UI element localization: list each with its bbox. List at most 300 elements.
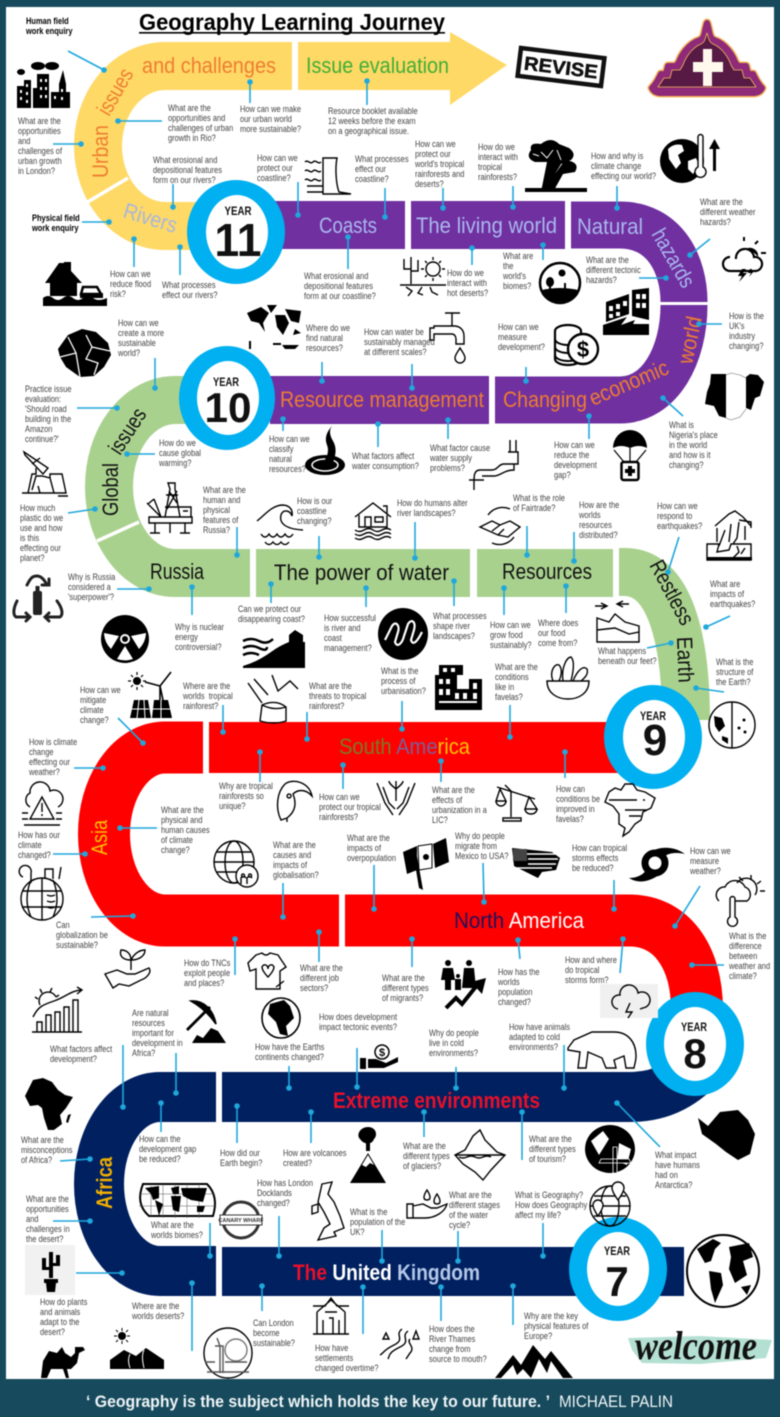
- text: sustainable urban world: more sustainable?: [240, 124, 301, 134]
- icon: rainforest trees: [525, 140, 587, 192]
- text: features at coastline: form at our coastline?: [304, 291, 376, 301]
- text: impacts of earthquakes: impacts of: [710, 589, 744, 599]
- text: disappearing coast: disappearing coast?: [238, 614, 305, 624]
- icon: settlement house: [313, 1298, 349, 1334]
- text: weather and climate: difference: [729, 941, 762, 951]
- text: coast management: [324, 613, 376, 653]
- text: opportunities in London: challenges of: [18, 146, 62, 156]
- text: resource booklet: Resource booklet available: [328, 106, 418, 116]
- band: year 9 south america (red): [209, 722, 654, 773]
- text: opportunities in Rio: What are the: [168, 103, 211, 113]
- text: improve favelas: favelas?: [556, 814, 584, 824]
- text: where food comes from: [538, 618, 578, 648]
- band labels: Resource management: [280, 387, 484, 412]
- text: shape river landscapes: landscapes?: [433, 631, 475, 641]
- text: opportunities in London: What are the: [18, 116, 61, 126]
- icon: oil swirl: [305, 425, 345, 475]
- text: water cycle: What are the: [449, 1190, 492, 1200]
- text: reduce development gap: How can the: [139, 1134, 181, 1144]
- text: UK population: What is the: [350, 1207, 387, 1217]
- text: climate changed: [18, 830, 60, 860]
- icon: volcano: [350, 1127, 386, 1183]
- text: global warming: [158, 438, 202, 469]
- text: natural resources in Africa: important for: [132, 1028, 174, 1038]
- text: world's biomes: [502, 251, 534, 291]
- text: climate change: [590, 151, 656, 182]
- text: measure development: [498, 322, 546, 352]
- text: tropical storms form: [565, 955, 617, 985]
- text: plastic use: is this: [20, 533, 39, 543]
- text: opportunities in London: [18, 116, 63, 176]
- text: weather hazards: hazards?: [700, 217, 731, 227]
- text: practice issue evaluation: [24, 384, 72, 444]
- band: year 11 urban issues and rivers (yellow): [86, 66, 292, 226]
- text: development gap: How can we: [554, 440, 595, 450]
- text: sustainable urban world: How can we make: [240, 104, 301, 114]
- text: plastic use: effecting our: [20, 543, 61, 553]
- text: coastline changing: How is our: [297, 496, 332, 506]
- text: reduce development gap: [139, 1134, 196, 1164]
- text: worlds biomes: What are the: [151, 1220, 194, 1230]
- text: urbanisation: What is the: [381, 666, 418, 676]
- icon: globe and plane: [585, 1125, 635, 1173]
- text: settlements: How have: [315, 1343, 348, 1353]
- text: desert opportunities: and: [26, 1214, 38, 1224]
- text: resource booklet: on a geographical issue.: [328, 126, 409, 136]
- band: year 8 north america (red): [345, 920, 697, 1010]
- text: fairtrade: [512, 493, 566, 513]
- icon: globe and thermometer: [660, 134, 720, 183]
- text: river landscapes: [396, 498, 468, 518]
- icon: cut down tree: [248, 675, 298, 723]
- text: erosional features on rivers: What erosional and: [153, 155, 217, 165]
- text: water cycle: different stages: [449, 1200, 500, 1210]
- year 9 badge: [604, 685, 702, 789]
- text: features of Russia: Russia?: [203, 525, 230, 535]
- text: where food comes from: come from?: [538, 638, 577, 648]
- text: opportunities in Rio: opportunities and: [168, 113, 225, 123]
- icon: ocean wave: [257, 505, 303, 544]
- text: earth begin: [220, 1148, 262, 1168]
- text: tectonic hazards: hazards?: [586, 275, 617, 285]
- text: improve favelas: [556, 784, 600, 824]
- icon: aid parachute: [613, 430, 647, 480]
- text: water consumption: [351, 451, 420, 472]
- text: overpopulation: What are the: [347, 833, 390, 843]
- text: classify resources: resources?: [269, 464, 306, 474]
- text: favelas conditions: conditions: [495, 672, 529, 682]
- text: mitigate climate change: mitigate: [80, 695, 106, 705]
- year 10 badge: 10: [204, 384, 252, 431]
- band labels: Global: [98, 463, 123, 516]
- icon: sun and desert: [110, 1328, 164, 1369]
- text: cold environments life: environments?: [429, 1048, 478, 1058]
- icon: plastic bottle recycling: [14, 576, 62, 621]
- band labels: and challenges: [142, 53, 276, 78]
- text: development gap: [554, 440, 598, 481]
- band labels: South America: [339, 734, 471, 759]
- text: sustainable London: sustainable?: [253, 1338, 295, 1348]
- text: world's biomes: What are: [503, 251, 533, 261]
- text: rainforest threats: rainforest?: [309, 701, 344, 711]
- text: UK's industry: industry: [729, 331, 755, 341]
- icon: antarctica map: [698, 1110, 755, 1160]
- icon: toucan: [278, 781, 312, 822]
- icon: earth continents: [262, 998, 300, 1038]
- text: sustainable world: [117, 318, 164, 358]
- text: development tectonic events: How does development: [319, 1012, 397, 1022]
- text: plastic use: How much: [20, 503, 55, 513]
- text: desert opportunities: challenges in: [26, 1224, 70, 1234]
- text: sustainable urban world: [240, 104, 302, 134]
- text: resources distributed: How are the: [579, 500, 619, 510]
- text: overpopulation: impacts of: [347, 843, 381, 853]
- text: features of Europe: Europe?: [524, 1331, 552, 1341]
- text: glaciers: of glaciers?: [403, 1161, 441, 1171]
- text: measure weather: [690, 846, 731, 876]
- text: climate change: climate change: [591, 161, 641, 171]
- text: earth begin: Earth begin?: [220, 1158, 262, 1168]
- text: types of migrants: of migrants?: [382, 993, 423, 1003]
- text: causes of climate change: What are the: [161, 805, 204, 815]
- text: erosional features on rivers: form on our rivers?: [153, 175, 216, 185]
- text: coast management: coast: [324, 633, 342, 643]
- text: Nigeria: changing?: [669, 460, 703, 470]
- icon: collapsing building: [603, 288, 649, 335]
- text: measure weather: How can we: [690, 846, 731, 856]
- text: Nigeria: [668, 420, 718, 471]
- text: settlements: [315, 1343, 379, 1373]
- icon: hurricane: [629, 848, 685, 881]
- text: antarctica: have humans: [655, 1160, 700, 1170]
- text: world population: [498, 967, 540, 1007]
- text: River Thames: River Thames: [429, 1334, 475, 1344]
- text: protect tropical rainforests: [319, 792, 381, 822]
- text: structure of the earth: the Earth?: [716, 677, 750, 687]
- icon: solar panels and wind turbine: [128, 672, 172, 718]
- icon: hand with seedling: [105, 950, 150, 988]
- band labels: The living world: [416, 213, 557, 238]
- year 8 badge: 8: [683, 1030, 707, 1077]
- text: water supply: problems?: [430, 463, 465, 473]
- text: weather and climate: [729, 931, 770, 981]
- text: classify resources: [268, 434, 310, 474]
- icon: flooded house: [43, 262, 107, 306]
- text: rainforests unique: [219, 781, 273, 811]
- text: rainforests unique: Why are tropical: [219, 781, 273, 791]
- text: opportunities in Rio: [168, 103, 234, 144]
- text: sustainable globalization: sustainable?: [56, 940, 98, 950]
- text: rainforest threats: threats to tropical: [309, 691, 366, 701]
- icon: hands holding plant: [377, 781, 415, 815]
- text: coast management: How successful: [324, 613, 376, 623]
- text: tropical storm effects: be reduced?: [572, 863, 614, 873]
- text: protect rainforests and deserts: protect our: [415, 149, 451, 159]
- text: opportunities in London: and: [18, 136, 30, 146]
- text: sustainable world: create a more: [118, 328, 164, 338]
- text: worlds deserts: worlds deserts?: [132, 1311, 184, 1321]
- text: mitigate climate change: How can we: [80, 685, 121, 695]
- title: Geography Learning Journey: [139, 9, 445, 35]
- text: processes effect coastline: [354, 154, 409, 184]
- text: coast management: management?: [324, 643, 372, 653]
- text: Nigeria: in the world: [669, 440, 707, 450]
- text: effects of urbanization: [432, 785, 487, 825]
- icon: radiation: [101, 615, 149, 663]
- text: climate and weather: change: [29, 747, 54, 757]
- text: structure of the earth: structure of: [716, 667, 753, 677]
- text: natural resources: resources?: [306, 343, 343, 353]
- text: reduce development gap: be reduced?: [139, 1154, 181, 1164]
- text: climate changed: How has our: [18, 830, 60, 840]
- text: protect coastline: How can we: [257, 153, 298, 163]
- text: weather and climate: What is the: [729, 931, 766, 941]
- text: sustainable London: [253, 1318, 295, 1348]
- text: development gap: development: [554, 460, 597, 470]
- icon: house on water: [355, 503, 391, 540]
- year 10 badge: [179, 346, 275, 450]
- icon: scales: [496, 785, 537, 821]
- icon: tree stump and axe: [22, 452, 68, 496]
- text: globalisation: What are the: [273, 840, 316, 850]
- text: london docklands: How has London: [257, 1178, 313, 1188]
- text: effects of urbanization: LIC?: [432, 815, 448, 825]
- band labels: North America: [454, 908, 585, 933]
- icon: biome circle: [540, 263, 580, 303]
- text: types of migrants: [382, 973, 429, 1003]
- icon: africa map: [25, 1078, 73, 1130]
- text: sustainable urban world: our urban world: [240, 114, 292, 124]
- text: UK population: UK?: [350, 1227, 365, 1237]
- text: factors affect development: development?: [50, 1054, 97, 1064]
- text: effects of urbanization: urbanization in a: [432, 805, 487, 815]
- text: protect rainforests and deserts: rainforests and: [415, 169, 464, 179]
- text: water management: at different scales?: [364, 347, 427, 357]
- text: Russia superpower: Why is Russia: [68, 572, 115, 582]
- icon: canary wharf roundel: [218, 1202, 264, 1238]
- text: Nigeria: and how is it: [669, 450, 711, 460]
- text: processes effect rivers: What processes: [162, 280, 216, 290]
- text: effects of urbanization: What are the: [432, 785, 475, 795]
- text: desert opportunities: What are the: [26, 1194, 69, 1204]
- text: opportunities in Rio: challenges of urban: [168, 123, 233, 133]
- band labels: Urban: [88, 125, 113, 178]
- text: reduce development gap: development gap: [139, 1144, 196, 1154]
- icon: fairtrade handshake: [480, 507, 520, 545]
- icon: earth structure: [709, 702, 755, 748]
- text: resource booklet: [328, 106, 418, 137]
- text: Russia superpower: [68, 572, 116, 602]
- text: global warming: How do we: [159, 438, 196, 448]
- text: causes of climate change: change?: [161, 845, 190, 855]
- text: where food comes from: our food: [538, 628, 565, 638]
- text: world's biomes: the: [503, 261, 513, 271]
- text: processes effect rivers: effect our rivers?: [162, 290, 218, 300]
- text: features at coastline: [304, 271, 376, 301]
- text: measure development: development?: [498, 342, 545, 352]
- text: practice issue evaluation: building in the: [25, 414, 71, 424]
- text: hot deserts: How do we: [447, 268, 484, 278]
- text: features at coastline: What erosional and: [304, 271, 368, 281]
- text: rainforest threats: What are the: [309, 681, 352, 691]
- icon: earthquake building: [707, 511, 752, 560]
- band: year 11 coasts, living world, natural hazards (purple): [270, 201, 684, 302]
- text: misconceptions of Africa: misconceptions: [21, 1145, 72, 1155]
- text: coast management: is river and: [324, 623, 361, 633]
- text: protect coastline: [256, 153, 298, 183]
- text: migration to USA: Mexico to USA?: [455, 851, 509, 861]
- text: causes of climate change: [161, 805, 210, 855]
- text: job sectors: sectors?: [300, 983, 328, 993]
- text: climate and weather: effecting our: [29, 757, 70, 767]
- text: resource booklet: 12 weeks before the exam: [328, 116, 416, 126]
- text: antarctica: [655, 1150, 700, 1190]
- text: globalisation: causes and: [273, 850, 311, 860]
- text: TNCs: How do TNCs: [184, 958, 230, 968]
- text: what is geography: [515, 1190, 587, 1220]
- text: climate change: effecting our world?: [591, 171, 656, 181]
- text: sustainable world: world?: [118, 348, 140, 358]
- text: respond to earthquakes: respond to: [657, 511, 692, 521]
- icon: welcome brush lettering: welcome: [635, 1323, 757, 1368]
- icon: cactus in pot: [25, 1245, 75, 1295]
- leader lines: [53, 51, 730, 1351]
- text: tropical storms form: do tropical: [565, 965, 599, 975]
- text: natural resources in Africa: resources: [132, 1018, 165, 1028]
- year 10 badge: YEAR: [213, 375, 239, 389]
- text: what is geography: What is Geography?: [515, 1190, 583, 1200]
- icon: mexican flag: [403, 838, 449, 890]
- text: improve favelas: improved in: [556, 804, 595, 814]
- quote banner: ‘ Geography is the subject which holds the key to our future. ’: [86, 1392, 550, 1411]
- icon: iceberg: [455, 1130, 505, 1180]
- text: processes effect coastline: What processes: [355, 154, 409, 164]
- year 8 badge: YEAR: [681, 1020, 707, 1034]
- text: favelas conditions: favelas?: [495, 692, 523, 702]
- text: Nigeria: Nigeria's place: [669, 430, 718, 440]
- text: climate and weather: weather?: [29, 767, 60, 777]
- band: year 7 the united kingdom (navy): [222, 1247, 684, 1296]
- text: misconceptions of Africa: [21, 1135, 72, 1165]
- text: animals in cold environments: How have animals: [509, 1022, 570, 1032]
- text: tourism: of tourism?: [529, 1154, 566, 1164]
- text: physical field work enquiry: [31, 213, 80, 234]
- text: practice issue evaluation: 'Should road: [25, 404, 67, 414]
- text: glaciers: [403, 1141, 450, 1171]
- text: opportunities in Rio: growth in Rio?: [168, 133, 216, 143]
- text: impacts of earthquakes: What are: [710, 579, 740, 589]
- text: grow food: How can we: [490, 620, 531, 630]
- text: plants and animals in desert: [40, 1297, 87, 1337]
- text: earth begin: How did our: [220, 1148, 260, 1158]
- text: london docklands: changed?: [257, 1198, 290, 1208]
- text: overpopulation: overpopulation: [347, 853, 396, 863]
- text: coastline changing: coastline: [297, 506, 326, 516]
- text: measure development: measure: [498, 332, 527, 342]
- text: River Thames: source to mouth?: [429, 1354, 487, 1364]
- text: weather and climate: weather and: [729, 961, 770, 971]
- text: climate and weather: [29, 737, 77, 777]
- text: overpopulation: [347, 833, 396, 863]
- text: protect tropical rainforests: How can we: [319, 792, 360, 802]
- icon: polar bear: [568, 1032, 636, 1068]
- text: world population: changed?: [498, 997, 531, 1007]
- text: beneath our feet: beneath our feet?: [598, 656, 657, 666]
- text: hot deserts: hot deserts?: [447, 288, 488, 298]
- icon: hand and money: [360, 1045, 398, 1069]
- text: plastic use: plastic do we: [20, 513, 63, 523]
- text: development tectonic events: [319, 1012, 397, 1032]
- text: migration to USA: migrate from: [455, 841, 497, 851]
- text: water supply: [429, 443, 490, 474]
- text: practice issue evaluation: continue?': [25, 434, 59, 444]
- text: world's biomes: world's: [503, 271, 526, 281]
- icon: weather warning cloud: [22, 782, 63, 825]
- quote banner: [0, 1379, 780, 1417]
- text: volcanoes: [283, 1148, 347, 1168]
- text: settlements: settlements: [315, 1353, 353, 1363]
- text: features at coastline: depositional features: [304, 281, 373, 291]
- text: protect coastline: coastline?: [257, 173, 291, 183]
- text: opportunities in London: urban growth: [18, 156, 62, 166]
- icon: london landmarks circle: [204, 1328, 252, 1378]
- text: water cycle: of the water: [449, 1210, 488, 1220]
- band: year 8 africa (navy): [99, 1097, 216, 1271]
- icon: hand and money: $: [379, 1047, 385, 1059]
- text: misconceptions of Africa: of Africa?: [21, 1155, 52, 1165]
- year 7 badge: YEAR: [604, 1244, 630, 1258]
- text: water consumption: water consumption?: [352, 461, 419, 471]
- icon: storm cloud: [600, 984, 658, 1018]
- text: nuclear energy: energy: [175, 632, 198, 642]
- text: climate and weather: How is climate: [29, 737, 77, 747]
- text: desert opportunities: the desert?: [26, 1234, 63, 1244]
- text: natural resources: [306, 323, 350, 353]
- text: protect rainforests and deserts: world's tropical: [415, 159, 464, 169]
- text: tropical rainforests location: Where are the: [183, 681, 230, 691]
- text: migration to USA: Why do people: [455, 831, 505, 841]
- text: TNCs: [184, 958, 230, 988]
- text: processes effect rivers: [162, 280, 218, 300]
- icon: brazil map: [605, 784, 655, 836]
- text: worlds biomes: worlds biomes?: [151, 1230, 203, 1240]
- band labels: Coasts: [319, 213, 377, 238]
- text: water cycle: [449, 1190, 500, 1230]
- text: where food comes from: Where does: [538, 618, 578, 628]
- text: sustainable world: sustainable: [118, 338, 156, 348]
- text: coastline changing: [296, 496, 333, 527]
- text: river landscapes: river landscapes?: [397, 508, 456, 518]
- text: hot deserts: interact with: [447, 278, 487, 288]
- band labels: Issue evaluation: [306, 53, 449, 78]
- text: tourism: [529, 1134, 576, 1164]
- text: fairtrade: of Fairtrade?: [513, 503, 555, 513]
- band labels: Russia: [150, 559, 205, 584]
- text: tropical rainforests location: [183, 681, 233, 711]
- icon: coins and dollar: [555, 325, 598, 365]
- text: river landscapes: How do humans alter: [397, 498, 468, 508]
- text: mitigate climate change: [80, 685, 121, 725]
- text: causes of climate change: physical and: [161, 815, 203, 825]
- band: year 10 resource management, changing economic world (purple): [270, 305, 684, 424]
- text: tectonic hazards: different tectonic: [586, 265, 641, 275]
- text: causes of climate change: of climate: [161, 835, 193, 845]
- text: volcanoes: How are volcanoes: [283, 1148, 347, 1158]
- text: improve favelas: How can: [556, 784, 585, 794]
- text: natural resources in Africa: Are natural: [132, 1008, 169, 1018]
- text: climate changed: changed?: [18, 850, 51, 860]
- text: tropical storms form: How and where: [565, 955, 617, 965]
